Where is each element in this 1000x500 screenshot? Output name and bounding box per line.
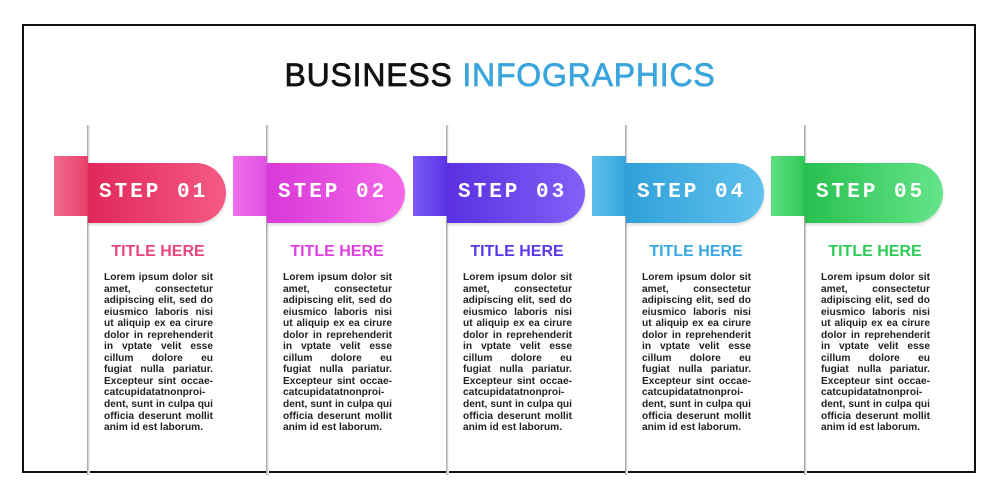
body text: ut aliquip ex ea cirure bbox=[463, 318, 572, 329]
panel: step 01 bbox=[54, 125, 227, 475]
body text: dolor in reprehenderit bbox=[283, 330, 392, 341]
step 02 tab bbox=[267, 163, 405, 223]
panel: step 03 bbox=[413, 125, 586, 475]
body text: catcupidatatnonproi- bbox=[821, 387, 922, 398]
heading: TITLE HERE bbox=[649, 243, 743, 260]
body text: dolor in reprehenderit bbox=[463, 330, 572, 341]
body text: Lorem ipsum dolor sit bbox=[821, 272, 930, 283]
body text: eiusmico laboris nisi bbox=[283, 307, 392, 318]
body text: Lorem ipsum dolor sit bbox=[283, 272, 392, 283]
body text: Lorem ipsum dolor sit bbox=[463, 272, 572, 283]
body text: dent, sunt in culpa qui bbox=[283, 399, 392, 410]
tab flap bbox=[54, 156, 88, 216]
body text: dent, sunt in culpa qui bbox=[821, 399, 930, 410]
body text: fugiat nulla pariatur. bbox=[283, 364, 392, 375]
body text: adipiscing elit, sed do bbox=[283, 295, 392, 306]
body text: officia deserunt mollit bbox=[821, 411, 930, 422]
tab flap bbox=[413, 156, 447, 216]
body text: eiusmico laboris nisi bbox=[104, 307, 213, 318]
body text: Excepteur sint occae- bbox=[104, 376, 213, 387]
step 01 tab: STEP 01 bbox=[99, 181, 208, 204]
body text: amet, consectetur bbox=[642, 284, 751, 295]
body text: officia deserunt mollit bbox=[283, 411, 392, 422]
body text: fugiat nulla pariatur. bbox=[463, 364, 572, 375]
body text: adipiscing elit, sed do bbox=[104, 295, 213, 306]
body text: in vptate velit esse bbox=[463, 341, 572, 352]
body text: anim id est laborum. bbox=[642, 422, 741, 433]
body text: anim id est laborum. bbox=[821, 422, 920, 433]
body text: catcupidatatnonproi- bbox=[104, 387, 205, 398]
body text: eiusmico laboris nisi bbox=[463, 307, 572, 318]
body text: cillum dolore eu bbox=[642, 353, 751, 364]
body text: anim id est laborum. bbox=[104, 422, 203, 433]
heading: TITLE HERE bbox=[111, 243, 205, 260]
body text: amet, consectetur bbox=[463, 284, 572, 295]
step 02 tab: STEP 02 bbox=[278, 181, 387, 204]
body text: Lorem ipsum dolor sit bbox=[104, 272, 213, 283]
body text: in vptate velit esse bbox=[642, 341, 751, 352]
heading: TITLE HERE bbox=[290, 243, 384, 260]
body text: officia deserunt mollit bbox=[463, 411, 572, 422]
step 03 tab: STEP 03 bbox=[458, 181, 567, 204]
body text: amet, consectetur bbox=[104, 284, 213, 295]
body text bbox=[104, 272, 213, 433]
body text: amet, consectetur bbox=[821, 284, 930, 295]
body text: cillum dolore eu bbox=[821, 353, 930, 364]
body text: adipiscing elit, sed do bbox=[642, 295, 751, 306]
body text: dent, sunt in culpa qui bbox=[463, 399, 572, 410]
heading: TITLE HERE bbox=[470, 243, 564, 260]
body text: cillum dolore eu bbox=[463, 353, 572, 364]
body text: fugiat nulla pariatur. bbox=[642, 364, 751, 375]
tab flap bbox=[233, 156, 267, 216]
body text: catcupidatatnonproi- bbox=[283, 387, 384, 398]
body text bbox=[463, 272, 572, 433]
body text: anim id est laborum. bbox=[283, 422, 382, 433]
panel: step 04 bbox=[592, 125, 765, 475]
tab flap bbox=[592, 156, 626, 216]
body text: catcupidatatnonproi- bbox=[642, 387, 743, 398]
body text: fugiat nulla pariatur. bbox=[104, 364, 213, 375]
body text: ut aliquip ex ea cirure bbox=[283, 318, 392, 329]
body text bbox=[821, 272, 930, 433]
body text: eiusmico laboris nisi bbox=[642, 307, 751, 318]
body text: Lorem ipsum dolor sit bbox=[642, 272, 751, 283]
title: BUSINESS INFOGRAPHICS bbox=[284, 57, 716, 93]
body text: catcupidatatnonproi- bbox=[463, 387, 564, 398]
body text: amet, consectetur bbox=[283, 284, 392, 295]
body text: ut aliquip ex ea cirure bbox=[104, 318, 213, 329]
heading: TITLE HERE bbox=[828, 243, 922, 260]
body text bbox=[283, 272, 392, 433]
body text: dolor in reprehenderit bbox=[104, 330, 213, 341]
body text: cillum dolore eu bbox=[283, 353, 392, 364]
body text: in vptate velit esse bbox=[283, 341, 392, 352]
body text: Excepteur sint occae- bbox=[283, 376, 392, 387]
step 04 tab: STEP 04 bbox=[637, 181, 746, 204]
body text: ut aliquip ex ea cirure bbox=[642, 318, 751, 329]
body text: Excepteur sint occae- bbox=[463, 376, 572, 387]
tab flap bbox=[771, 156, 805, 216]
step 05 tab bbox=[805, 163, 943, 223]
body text: anim id est laborum. bbox=[463, 422, 562, 433]
body text: dolor in reprehenderit bbox=[821, 330, 930, 341]
step 03 tab bbox=[447, 163, 585, 223]
body text: in vptate velit esse bbox=[104, 341, 213, 352]
step 05 tab: STEP 05 bbox=[816, 181, 925, 204]
body text: eiusmico laboris nisi bbox=[821, 307, 930, 318]
body text: officia deserunt mollit bbox=[642, 411, 751, 422]
body text: officia deserunt mollit bbox=[104, 411, 213, 422]
panel: step 05 bbox=[771, 125, 944, 475]
body text: Excepteur sint occae- bbox=[821, 376, 930, 387]
step 04 tab bbox=[626, 163, 764, 223]
body text: dolor in reprehenderit bbox=[642, 330, 751, 341]
body text: adipiscing elit, sed do bbox=[821, 295, 930, 306]
step 01 tab bbox=[88, 163, 226, 223]
body text: Excepteur sint occae- bbox=[642, 376, 751, 387]
panel: step 02 bbox=[233, 125, 406, 475]
body text bbox=[642, 272, 751, 433]
body text: fugiat nulla pariatur. bbox=[821, 364, 930, 375]
body text: ut aliquip ex ea cirure bbox=[821, 318, 930, 329]
body text: adipiscing elit, sed do bbox=[463, 295, 572, 306]
body text: in vptate velit esse bbox=[821, 341, 930, 352]
body text: dent, sunt in culpa qui bbox=[104, 399, 213, 410]
body text: dent, sunt in culpa qui bbox=[642, 399, 751, 410]
body text: cillum dolore eu bbox=[104, 353, 213, 364]
